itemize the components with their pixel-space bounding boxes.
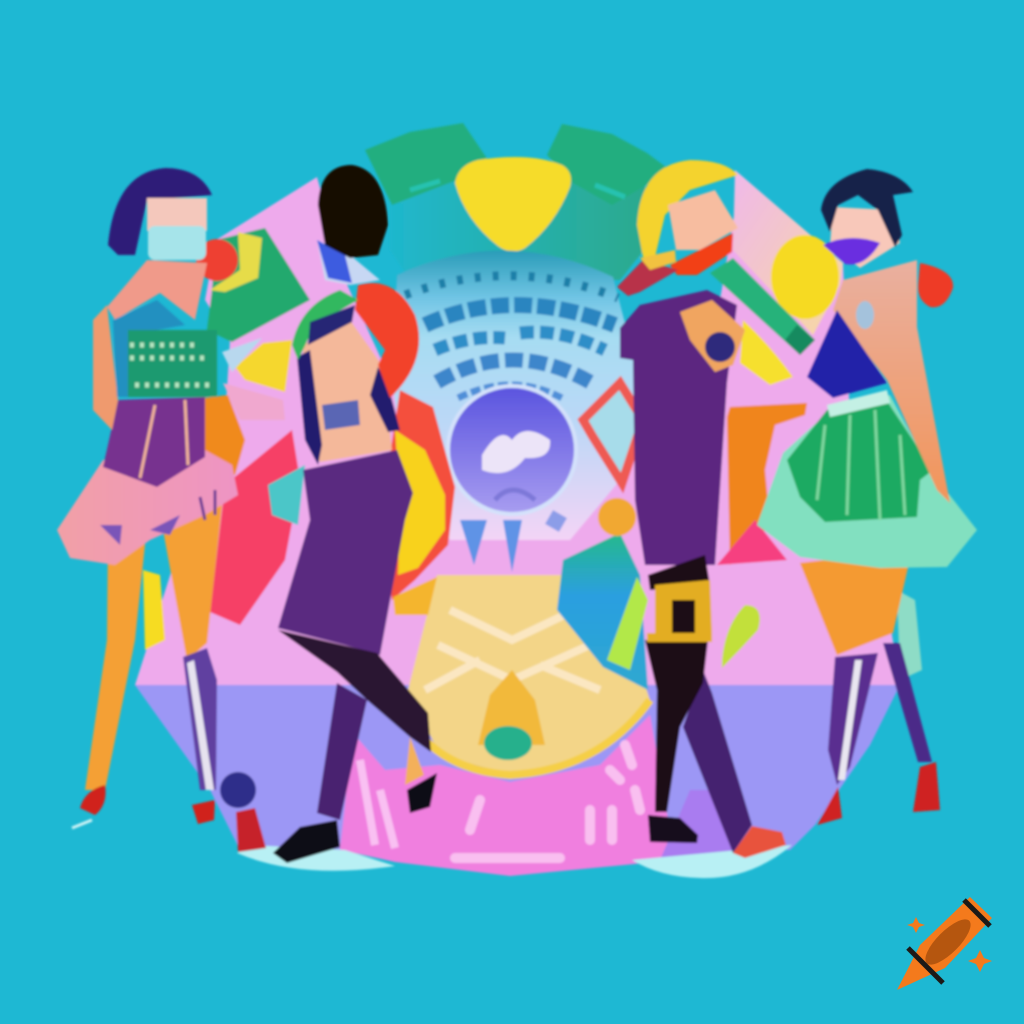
shoes <box>817 762 940 825</box>
body <box>620 290 737 565</box>
shorts <box>800 550 912 655</box>
floor highlights <box>237 845 792 878</box>
orange scarf <box>670 233 733 275</box>
figure 4: right girl <box>757 169 977 825</box>
trousers <box>278 450 413 655</box>
belt <box>827 390 890 417</box>
mint skirt <box>757 395 977 568</box>
lime blob <box>722 605 760 668</box>
front leg <box>645 640 708 812</box>
waist <box>648 555 710 590</box>
purple dress <box>103 397 205 487</box>
figure 1: left girl <box>57 168 238 828</box>
chest <box>303 320 392 462</box>
shoes <box>648 815 698 843</box>
yellow pick shape <box>455 157 571 252</box>
green panel <box>128 330 217 397</box>
legs <box>85 505 222 790</box>
teal shard <box>268 465 305 525</box>
belt <box>647 580 712 642</box>
blonde hair <box>637 160 738 257</box>
yellow gap between legs <box>143 570 165 650</box>
feet <box>405 737 424 785</box>
figure 3: centre-right figure <box>557 160 786 858</box>
face <box>668 190 738 250</box>
creature <box>557 533 648 690</box>
navy top <box>807 310 887 398</box>
arms and torso <box>93 305 118 430</box>
legs <box>828 653 878 785</box>
red lattice right of medallion <box>583 383 643 483</box>
arm <box>680 300 745 372</box>
central backdrop: pink upper area <box>135 177 900 685</box>
mask <box>148 226 206 260</box>
face <box>830 207 900 268</box>
dark strands <box>297 350 400 465</box>
hair <box>108 168 212 255</box>
orange hair <box>355 283 419 398</box>
green skirt <box>787 398 933 522</box>
red flame left <box>210 430 300 625</box>
red and orange flames right <box>717 403 807 565</box>
yellow lower emblem <box>393 575 650 775</box>
crayon logo <box>897 897 992 990</box>
green arch <box>365 123 670 280</box>
hair <box>821 169 913 247</box>
shoes <box>80 785 215 824</box>
central backdrop: lavender lower band <box>135 685 900 850</box>
pom toy <box>220 772 256 808</box>
green hair <box>292 290 358 360</box>
teal top <box>113 300 185 397</box>
red drop <box>918 263 953 307</box>
left fan with red dot <box>196 228 310 475</box>
purple mask <box>823 238 880 265</box>
face <box>147 198 207 231</box>
skirt <box>57 450 238 565</box>
back leg <box>683 670 752 853</box>
pink lower emblem <box>340 715 745 876</box>
pink arm with yellow sun <box>710 170 843 385</box>
neck <box>317 240 380 285</box>
central medallion <box>392 250 645 572</box>
head <box>318 165 388 258</box>
red and yellow flames beside medallion <box>380 390 455 600</box>
pale teal behind leg <box>897 590 922 680</box>
torso <box>833 260 950 503</box>
figure 2: centre-left figure <box>220 165 437 863</box>
